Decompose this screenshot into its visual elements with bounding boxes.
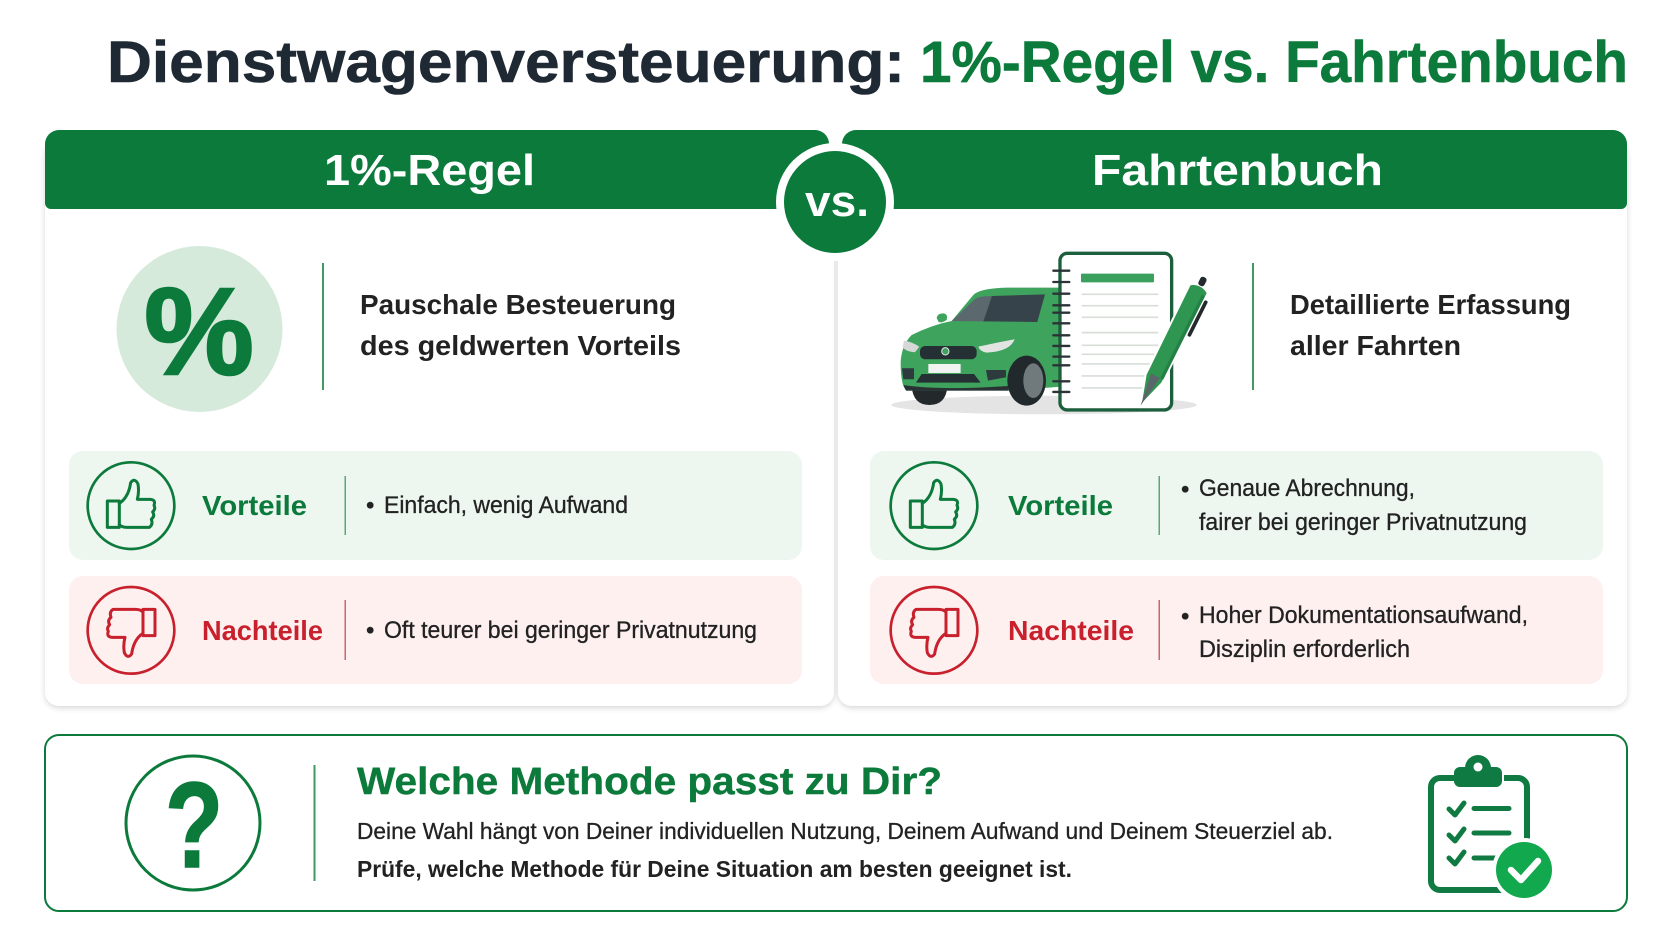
panel: 1%-Regel — [45, 130, 834, 706]
row: Nachteile 1%-Regel: Oft teurer bei geringer Privatnutzung — [384, 617, 757, 644]
row: Vorteile Fahrtenbuch: Genaue Abrechnung, — [1199, 475, 1415, 502]
panel heading: Fahrtenbuch — [842, 130, 1627, 209]
badge: vs.: vs. — [805, 177, 869, 226]
icon: question mark: ? — [165, 758, 223, 894]
title: Dienstwagenversteuerung: — [107, 30, 905, 95]
callout text: Deine Wahl hängt von Deiner individuellen Nutzung, Deinem Aufwand und Deinem Steuerziel ab. — [357, 818, 1333, 844]
icon: question mark — [126, 756, 260, 894]
row: Vorteile 1%-Regel: Einfach, wenig Aufwand — [384, 492, 628, 519]
row: Vorteile Fahrtenbuch: • — [1181, 476, 1189, 503]
description: 1%-Regel: Pauschale Besteuerung — [360, 289, 676, 320]
row: Nachteile 1%-Regel: • — [366, 617, 374, 644]
panel heading: Fahrtenbuch: Fahrtenbuch — [1092, 146, 1383, 195]
description: Fahrtenbuch: Detaillierte Erfassung — [1290, 289, 1571, 320]
panel heading: 1%-Regel: 1%-Regel — [324, 146, 535, 195]
row: Vorteile 1%-Regel: • — [366, 492, 374, 519]
description: 1%-Regel — [322, 263, 681, 390]
row: Nachteile 1%-Regel: Nachteile — [202, 615, 323, 646]
icon: thumbs down — [88, 587, 174, 674]
icon: percent — [116, 246, 282, 412]
callout text: Prüfe, welche Methode für Deine Situation am besten geeignet ist. — [357, 856, 1072, 882]
row: Vorteile Fahrtenbuch: fairer bei geringer Privatnutzung — [1199, 509, 1527, 536]
callout text — [357, 818, 1333, 882]
title — [107, 30, 1628, 95]
title: 1%-Regel vs. Fahrtenbuch — [920, 30, 1628, 95]
description: 1%-Regel: des geldwerten Vorteils — [360, 330, 681, 361]
row: Nachteile Fahrtenbuch: Nachteile — [1008, 615, 1134, 646]
icon: car with logbook and pen — [891, 253, 1217, 414]
panel heading: 1%-Regel — [45, 130, 829, 209]
description: Fahrtenbuch — [1252, 263, 1571, 390]
panel: Fahrtenbuch — [838, 130, 1627, 706]
row: Vorteile Fahrtenbuch: Vorteile — [1008, 490, 1113, 521]
description: Fahrtenbuch: aller Fahrten — [1290, 330, 1461, 361]
row: Nachteile Fahrtenbuch: Hoher Dokumentationsaufwand, — [1199, 602, 1528, 629]
row: Nachteile Fahrtenbuch: Disziplin erforderlich — [1199, 636, 1410, 663]
row: Nachteile 1%-Regel — [69, 576, 802, 684]
icon: thumbs up — [891, 462, 977, 549]
icon: thumbs up — [88, 462, 174, 549]
callout: Welche Methode passt zu Dir? — [45, 735, 1627, 911]
icon: thumbs down — [891, 587, 977, 674]
row: Nachteile Fahrtenbuch: • — [1181, 603, 1189, 630]
row: Nachteile Fahrtenbuch — [870, 576, 1603, 684]
badge: vs. — [776, 143, 894, 261]
icon: percent: % — [144, 264, 254, 401]
row: Vorteile Fahrtenbuch — [870, 451, 1603, 560]
row: Vorteile 1%-Regel: Vorteile — [202, 490, 307, 521]
callout heading: Welche Methode passt zu Dir? — [357, 761, 942, 803]
icon: clipboard with check — [1431, 755, 1556, 902]
row: Vorteile 1%-Regel — [69, 451, 802, 560]
